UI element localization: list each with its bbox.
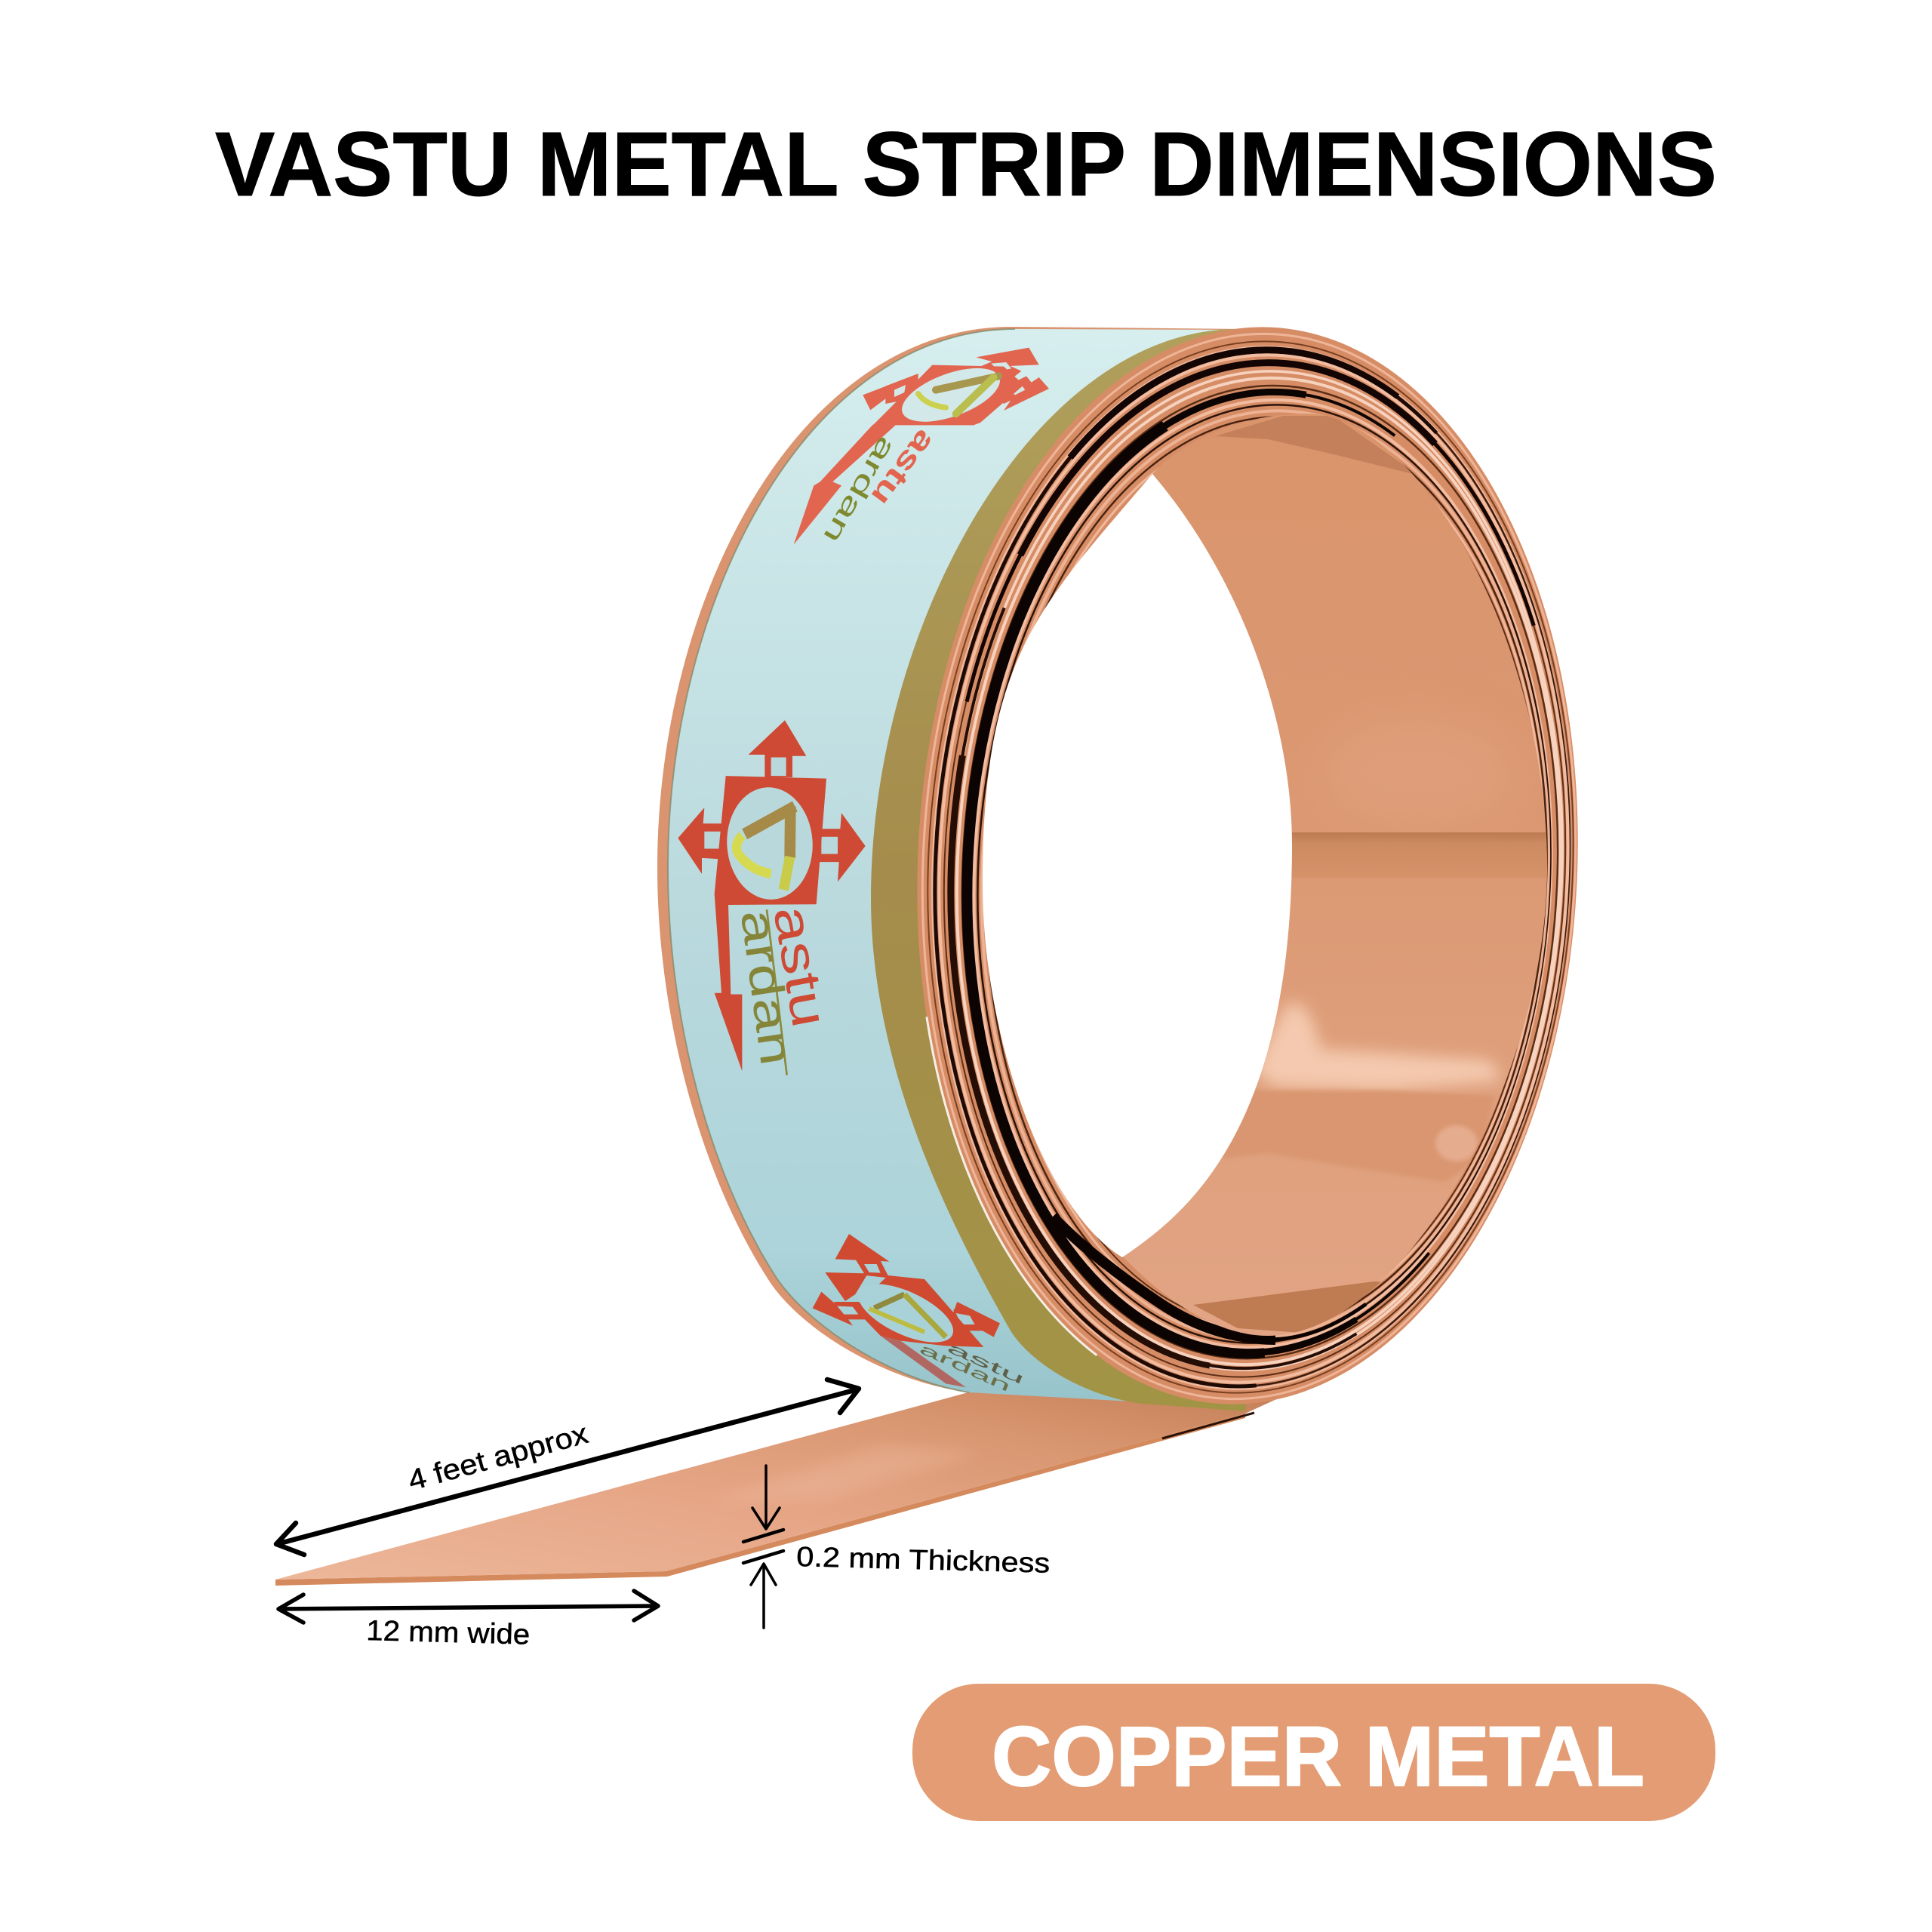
dimension: thickness arrows and label (743, 1466, 1051, 1628)
logo: bottom, foreshortened: ardan (917, 1340, 1013, 1395)
logo: top, foreshortened (794, 348, 1049, 549)
thin olive edge line on blue wrap (668, 329, 1015, 1392)
flat unrolled copper strip (275, 1392, 1283, 1586)
logo: centre, front-facing: ardan (731, 906, 802, 1069)
logo mark V (869, 1294, 946, 1337)
outer printed band: blue wrap (668, 329, 1245, 1411)
black gap hugging the bottom of the opening (1053, 1217, 1275, 1340)
logo: centre, front-facing (678, 720, 866, 1075)
label: 0.2 mm Thickness: 0.2 mm Thickness (796, 1541, 1051, 1579)
gold edge band (871, 329, 1283, 1411)
logo: top, foreshortened: ardan (817, 432, 902, 549)
infographic canvas (215, 131, 1715, 1821)
label: 4 feet approx: 4 feet approx (405, 1418, 592, 1497)
logo divider line (767, 909, 787, 1075)
logo wordmark: astu (864, 423, 942, 512)
dimension: width arrow and label (278, 1591, 658, 1651)
soft light patch (1390, 752, 1457, 759)
logo mark V (737, 806, 795, 890)
coil edge: stacked copper layers (894, 313, 1601, 1418)
logo: bottom, foreshortened (813, 1234, 1027, 1395)
logo mark V (918, 376, 998, 414)
bottom shadow wedge (1193, 1281, 1381, 1333)
reflected dark block (1223, 1091, 1494, 1182)
copper coil roll (657, 313, 1601, 1418)
inner copper surface (1123, 414, 1547, 1336)
top shadow wedge (1215, 416, 1419, 475)
logo wordmark: astu (944, 1339, 1027, 1388)
reflected glare (1253, 1003, 1502, 1091)
copper rim of outer wrap (657, 327, 1245, 1411)
label: 12 mm wide: 12 mm wide (366, 1615, 531, 1651)
badge text: COPPER METAL (992, 1709, 1644, 1804)
crease band (1292, 832, 1547, 878)
tapering end of the black gap (1268, 1304, 1366, 1340)
hole: white background seen through the roll (983, 474, 1292, 1257)
logo wordmark: astu (763, 901, 838, 1032)
material badge (912, 1684, 1715, 1821)
title: VASTU METAL STRIP DIMENSIONS (215, 112, 1717, 215)
dimension: length arrow and label (276, 1380, 859, 1555)
